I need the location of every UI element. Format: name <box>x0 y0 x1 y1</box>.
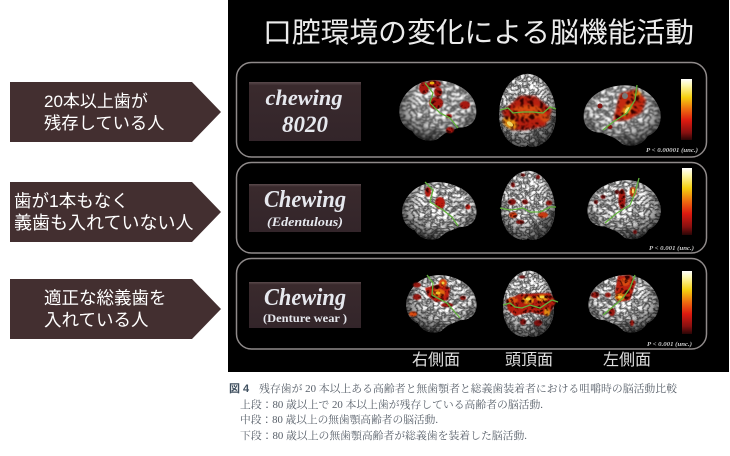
arrow label: no teeth and no dentures <box>10 182 221 242</box>
figure caption <box>229 382 678 442</box>
brain: top view, row 1 <box>499 74 556 147</box>
label box: chewing 8020: 8020 <box>282 112 328 137</box>
arrow label: proper full dentures: 入れている人 <box>44 310 149 330</box>
figure caption: 図 4 <box>229 382 250 395</box>
p value, row 2: P < 0.001 (unc.) <box>649 245 694 252</box>
label box: chewing edentulous <box>249 184 361 232</box>
brain: left side view, row 3 <box>588 275 659 333</box>
arrow label: no teeth and no dentures: 歯が1本もなく <box>14 191 129 211</box>
brain: right side view, row 1 <box>399 80 476 141</box>
arrow label: no teeth and no dentures: 義歯も入れていない人 <box>14 213 193 233</box>
arrow label: proper full dentures <box>10 279 221 339</box>
panel: row 2 chewing edentulous <box>236 162 706 253</box>
brain: right side view, row 2 <box>402 182 476 240</box>
arrow label: 20 or more teeth remaining: 残存している人 <box>44 113 164 133</box>
view label: left side: 左側面 <box>603 351 651 369</box>
panel: row 3 chewing denture wear <box>236 258 706 349</box>
brain: left side view, row 2 <box>588 178 661 239</box>
brain: top view, row 2 <box>500 171 556 240</box>
panel: row 1 chewing 8020 <box>236 62 706 157</box>
title: 口腔環境の変化による脳機能活動 <box>263 17 694 48</box>
label box: chewing edentulous: (Edentulous) <box>267 214 343 229</box>
arrow label: 20 or more teeth remaining: 20本以上歯が <box>44 92 148 111</box>
label box: chewing 8020 <box>249 82 361 141</box>
label box: chewing edentulous: Chewing <box>264 187 346 213</box>
view label: top: 頭頂面 <box>505 352 553 369</box>
color scale bar, row 3 <box>682 271 692 334</box>
arrow label: proper full dentures: 適正な総義歯を <box>44 288 166 308</box>
panel: black brain imaging figure <box>228 0 729 372</box>
p value, row 3: P < 0.001 (unc.) <box>647 341 692 348</box>
view label: right side: 右側面 <box>412 351 460 369</box>
label box: chewing 8020: chewing <box>266 85 342 110</box>
figure caption: 下段：80 歳以上の無歯顎高齢者が総義歯を装着した脳活動. <box>240 429 527 442</box>
p value, row 1: P < 0.00001 (unc.) <box>646 147 698 154</box>
brain: top view, row 3 <box>503 271 558 337</box>
arrow label: 20 or more teeth remaining <box>10 82 221 142</box>
color scale bar, row 2 <box>682 168 692 235</box>
label box: chewing denture wear: (Denture wear ) <box>263 313 347 325</box>
brain: right side view, row 3 <box>406 275 477 333</box>
figure caption: 中段：80 歳以上の無歯顎高齢者の脳活動. <box>240 413 438 426</box>
figure caption: 上段：80 歳以上で 20 本以上歯が残存している高齢者の脳活動. <box>240 398 543 411</box>
label box: chewing denture wear <box>249 282 361 328</box>
figure caption: 残存歯が 20 本以上ある高齢者と無歯顎者と総義歯装着者における咀嚼時の脳活動比較 <box>259 382 678 395</box>
label box: chewing denture wear: Chewing <box>264 285 346 311</box>
brain: left side view, row 1 <box>584 85 661 146</box>
color scale bar, row 1 <box>681 79 692 140</box>
